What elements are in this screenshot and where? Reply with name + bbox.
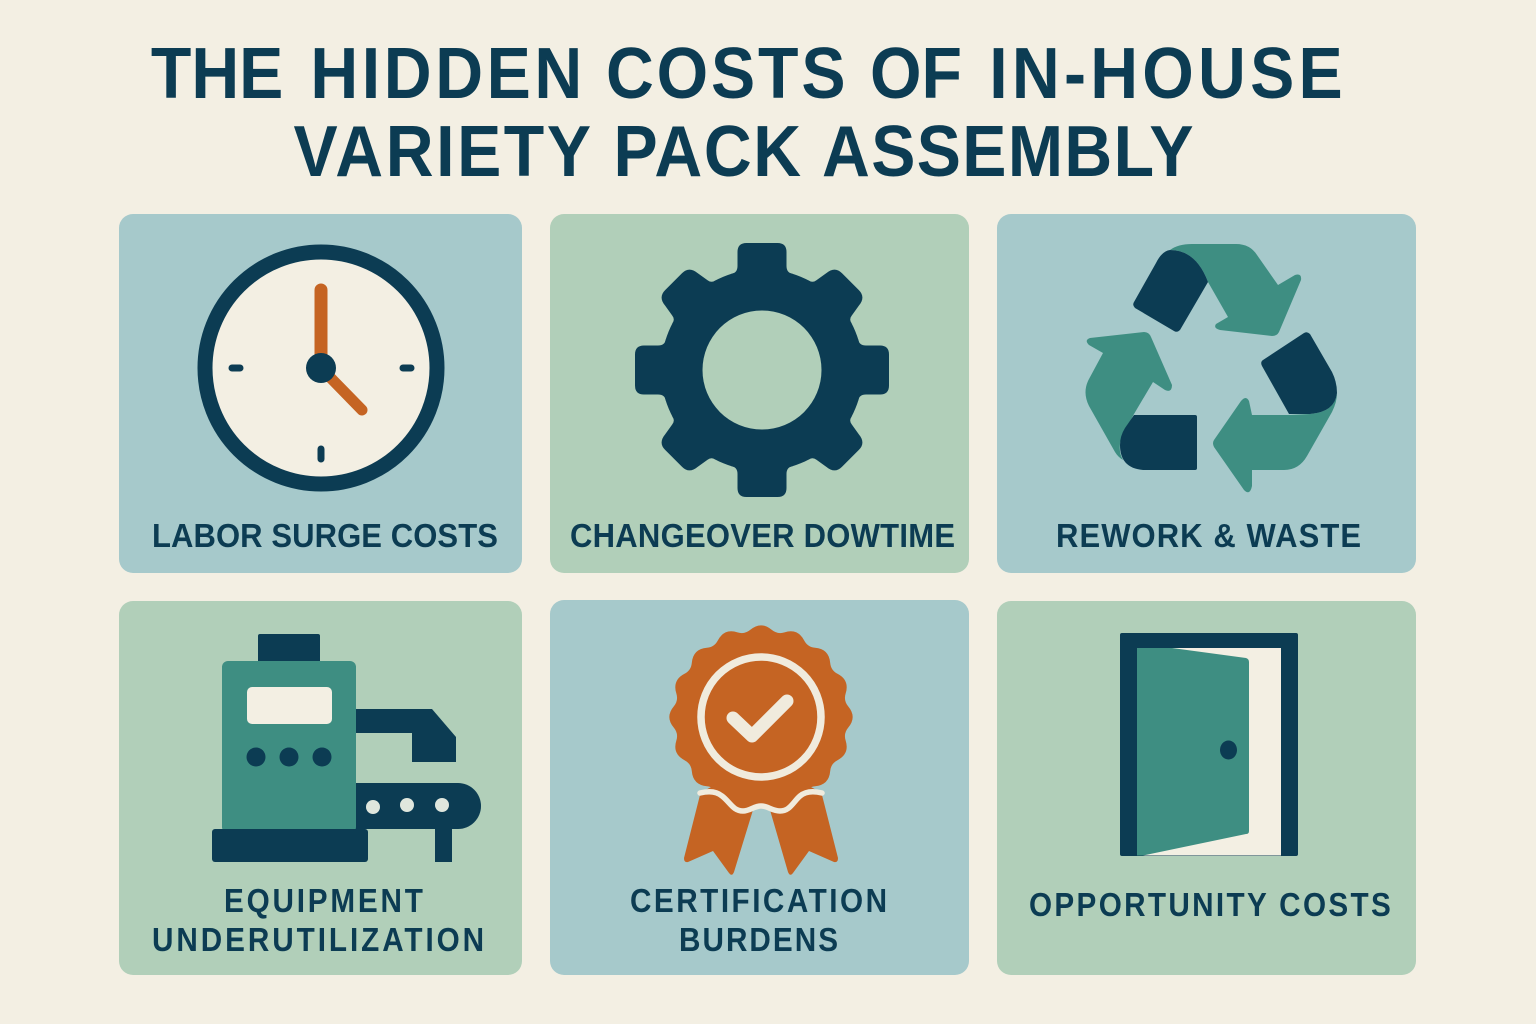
title: COSTS [606,32,848,114]
icon: recycling arrows [1086,244,1337,492]
title: ASSEMBLY [822,110,1195,192]
icon: gear [635,243,889,497]
label: equipment underutilization: EQUIPMENT [224,883,423,919]
title: HIDDEN [310,32,586,114]
panel: certification burdens [550,600,969,975]
label: changeover downtime: CHANGEOVER DOWTIME [570,517,955,554]
panel: opportunity costs [997,601,1416,975]
panel: rework and waste [997,214,1416,573]
title [151,32,1347,192]
panel: equipment underutilization [119,601,522,975]
icon: machine with conveyor [212,634,481,862]
label: rework and waste: REWORK & WASTE [1056,517,1361,554]
label: certification burdens: CERTIFICATION [630,883,887,919]
title: IN-HOUSE [989,32,1347,114]
label: equipment underutilization: UNDERUTILIZATION [152,922,484,958]
title: OF [870,32,962,114]
panel: changeover downtime [550,214,969,573]
label: certification burdens [630,883,887,958]
title: THE [151,32,283,114]
label: labor surge costs: LABOR SURGE COSTS [152,517,498,554]
icon: open door [1120,633,1298,856]
icon: clock [205,252,437,484]
title: PACK [613,110,803,192]
title: VARIETY [293,110,594,192]
label: certification burdens: BURDENS [679,922,838,958]
label: equipment underutilization [152,883,484,958]
icon: certification ribbon badge [669,625,853,875]
label: opportunity costs: OPPORTUNITY COSTS [1029,887,1391,923]
panel: labor surge costs [119,214,522,573]
